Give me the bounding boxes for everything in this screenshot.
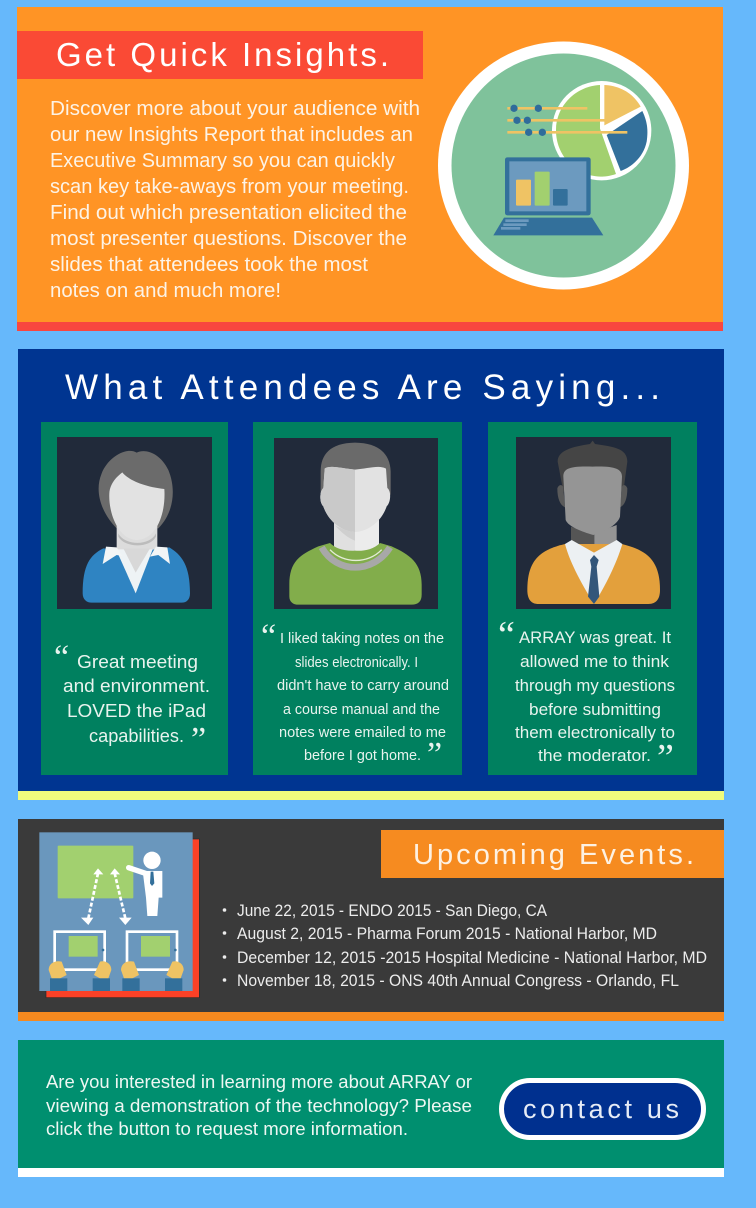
panel: upcoming events [18,819,724,1021]
card: testimonial 2: ” [427,736,442,773]
text block: insights description: Executive Summary so you can quickly [50,150,395,172]
panel: contact [18,1040,724,1177]
avatar: woman in blue [57,437,212,609]
text block: event list: November 18, 2015 - ONS 40th Annual Congress - Orlando, FL [237,972,679,990]
card: testimonial 3: ARRAY was great. It [519,628,671,647]
heading banner: Upcoming Events: Upcoming Events. [413,839,694,871]
card: testimonial 3: them electronically to [515,723,675,742]
card: testimonial 2: notes were emailed to me [279,724,446,741]
avatar: man in green [274,438,438,609]
card: testimonial 3: ” [657,737,674,779]
card: testimonial 1: “ [54,639,69,676]
text block: insights description: scan key take-aways from your meeting. [50,176,409,198]
text block: contact invitation: Are you interested in learning more about ARRAY or [46,1072,472,1092]
card: testimonial 3: before submitting [529,700,661,719]
card: testimonial 3: “ [498,614,515,656]
card: testimonial 2: I liked taking notes on the [280,630,444,647]
panel: quick insights [17,7,723,331]
icon: charts and laptop in circle [438,42,689,290]
panel: what attendees are saying [18,349,724,800]
card: testimonial 1: Great meeting [77,651,198,672]
card: testimonial 3: through my questions [515,676,675,695]
text block: insights description: Discover more about your audience with [50,98,420,120]
text block: insights description: notes on and much more! [50,280,281,302]
button: contact us: contact us [523,1094,679,1124]
heading: What Attendees Are Saying: What Attendees Are Saying... [65,368,660,407]
card: testimonial 3: allowed me to think [520,652,670,671]
card: testimonial 1: ” [191,721,206,758]
card: testimonial 1: capabilities. [89,725,184,746]
card: testimonial 1: LOVED the iPad [67,700,206,721]
text block: contact invitation [46,1072,472,1139]
button: contact us [502,1080,704,1138]
heading banner: Get Quick Insights: Get Quick Insights. [56,36,389,73]
icon: presenter and tablets [39,832,199,998]
card: testimonial 2: slides electronically. I [295,654,418,671]
text block: event list [223,902,707,990]
text block: contact invitation: viewing a demonstration of the technology? Please [46,1096,472,1116]
card: testimonial 2 [253,422,462,775]
heading banner: Get Quick Insights [17,31,423,79]
text block: event list: August 2, 2015 - Pharma Forum 2015 - National Harbor, MD [237,925,657,943]
text block: insights description [50,98,420,302]
card: testimonial 2: didn't have to carry around [277,677,449,694]
card: testimonial 2: before I got home. [304,747,421,764]
card: testimonial 1: and environment. [63,675,210,696]
text block: insights description: Find out which presentation elicited the [50,202,407,224]
text block: insights description: most presenter questions. Discover the [50,228,407,250]
text block: contact invitation: click the button to request more information. [46,1119,408,1139]
text block: insights description: our new Insights Report that includes an [50,124,413,146]
heading banner: Upcoming Events [381,830,724,878]
text block: insights description: slides that attendees took the most [50,254,368,276]
avatar: man in suit [516,437,671,609]
text block: event list: June 22, 2015 - ENDO 2015 - San Diego, CA [237,902,547,920]
card: testimonial 3 [488,422,697,779]
card: testimonial 1 [41,422,228,775]
card: testimonial 3: the moderator. [538,746,651,765]
card: testimonial 2: a course manual and the [283,701,440,718]
card: testimonial 2: “ [261,618,276,655]
text block: event list: December 12, 2015 -2015 Hospital Medicine - National Harbor, MD [237,949,707,967]
